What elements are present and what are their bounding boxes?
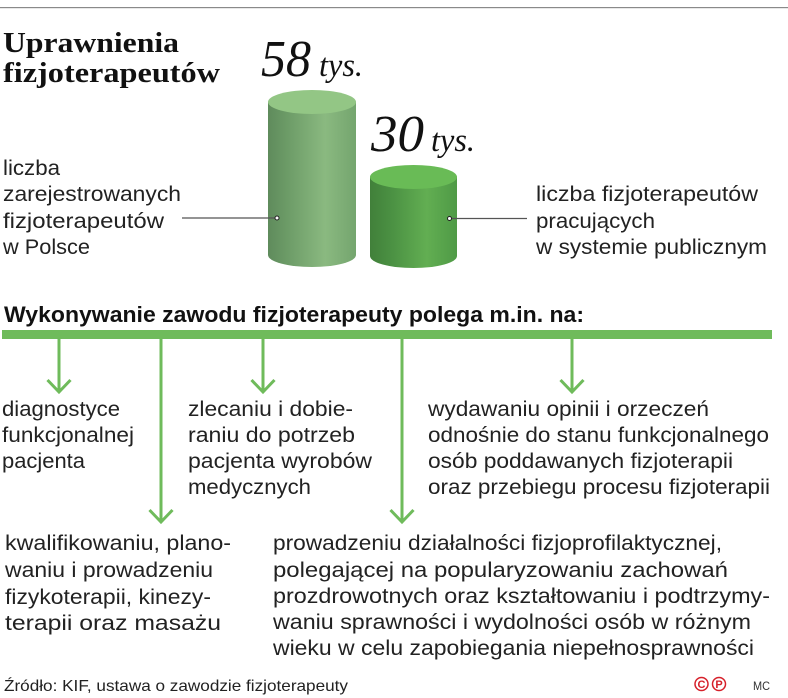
text: wydawaniu xyxy=(427,397,770,499)
label: public system: pracujących xyxy=(536,209,655,233)
value: 30 tys. xyxy=(370,106,475,163)
text: prowadzeniu: prowadzeniu działalności fizjoprofilaktycznej, xyxy=(273,531,722,555)
text: kwalifikowaniu xyxy=(4,531,231,635)
icon: copyright xyxy=(695,678,708,691)
text: wydawaniu: osób poddawanych fizjoterapii xyxy=(428,449,733,473)
text: kwalifikowaniu: terapii oraz masażu xyxy=(5,611,221,635)
text: diagnostyce xyxy=(2,397,134,473)
text: diagnostyce: funkcjonalnej xyxy=(2,423,134,447)
text: wydawaniu: wydawaniu opinii i orzeczeń xyxy=(427,397,709,421)
author: MC xyxy=(753,679,770,693)
title: Uprawnienia xyxy=(3,27,180,59)
text: diagnostyce: pacjenta xyxy=(2,449,85,473)
text: zlecaniu: zlecaniu i dobie- xyxy=(188,397,353,421)
icon: press: P xyxy=(715,679,723,691)
cylinder: registered physiotherapists xyxy=(268,90,356,267)
label: public system: w systemie publicznym xyxy=(535,235,767,259)
text: wydawaniu: oraz przebiegu procesu fizjoterapii xyxy=(428,475,770,499)
text: wydawaniu: odnośnie do stanu funkcjonalnego xyxy=(428,423,769,447)
value: 30 tys.: tys. xyxy=(431,123,475,159)
value: 30 tys.: 30 xyxy=(370,106,424,163)
value: 58 tys. xyxy=(261,31,363,88)
label: registered xyxy=(2,156,181,259)
label: registered: zarejestrowanych xyxy=(3,182,181,206)
leader line: left xyxy=(182,216,279,220)
label: registered: w Polsce xyxy=(2,235,90,259)
text: kwalifikowaniu: fizykoterapii, kinezy- xyxy=(5,585,211,609)
text: prowadzeniu: prozdrowotnych oraz kształtowaniu i podtrzymy- xyxy=(273,584,770,608)
label: public system: liczba fizjoterapeutów xyxy=(536,182,758,206)
label: public system xyxy=(535,182,767,259)
label: registered: fizjoterapeutów xyxy=(3,209,165,233)
text: kwalifikowaniu: kwalifikowaniu, plano- xyxy=(5,531,231,555)
value: 58 tys.: 58 xyxy=(261,31,311,88)
green bar xyxy=(2,330,772,339)
text: diagnostyce: diagnostyce xyxy=(2,397,120,421)
text: prowadzeniu: waniu sprawności i wydolności osób w różnym xyxy=(272,610,751,634)
text: zlecaniu: raniu do potrzeb xyxy=(188,423,355,447)
text: zlecaniu: medycznych xyxy=(188,475,311,499)
text: zlecaniu: pacjenta wyrobów xyxy=(188,449,372,473)
icon: copyright: C xyxy=(698,679,706,691)
label: registered: liczba xyxy=(3,156,60,180)
text: prowadzeniu: wieku w celu zapobiegania niepełnosprawności xyxy=(272,636,754,660)
section heading: Wykonywanie zawodu fizjoterapeuty polega m.in. na: xyxy=(4,302,584,327)
source: Źródło: KIF, ustawa o zawodzie fizjoterapeuty xyxy=(4,676,348,695)
title xyxy=(3,27,220,89)
icon: press xyxy=(712,678,726,691)
text: zlecaniu xyxy=(188,397,372,499)
arrow 2 xyxy=(150,339,172,522)
arrow 3 xyxy=(252,339,274,392)
cylinder: public system physiotherapists xyxy=(370,165,457,268)
text: prowadzeniu xyxy=(272,531,770,660)
arrow 5 xyxy=(560,339,584,392)
value: 58 tys.: tys. xyxy=(319,48,363,84)
text: kwalifikowaniu: waniu i prowadzeniu xyxy=(4,558,213,582)
title: fizjoterapeutów xyxy=(3,57,220,89)
text: prowadzeniu: polegającej na popularyzowaniu zachowań xyxy=(273,558,728,582)
leader line: right xyxy=(448,216,527,220)
arrow 1 xyxy=(48,339,70,392)
arrow 4 xyxy=(390,339,414,522)
